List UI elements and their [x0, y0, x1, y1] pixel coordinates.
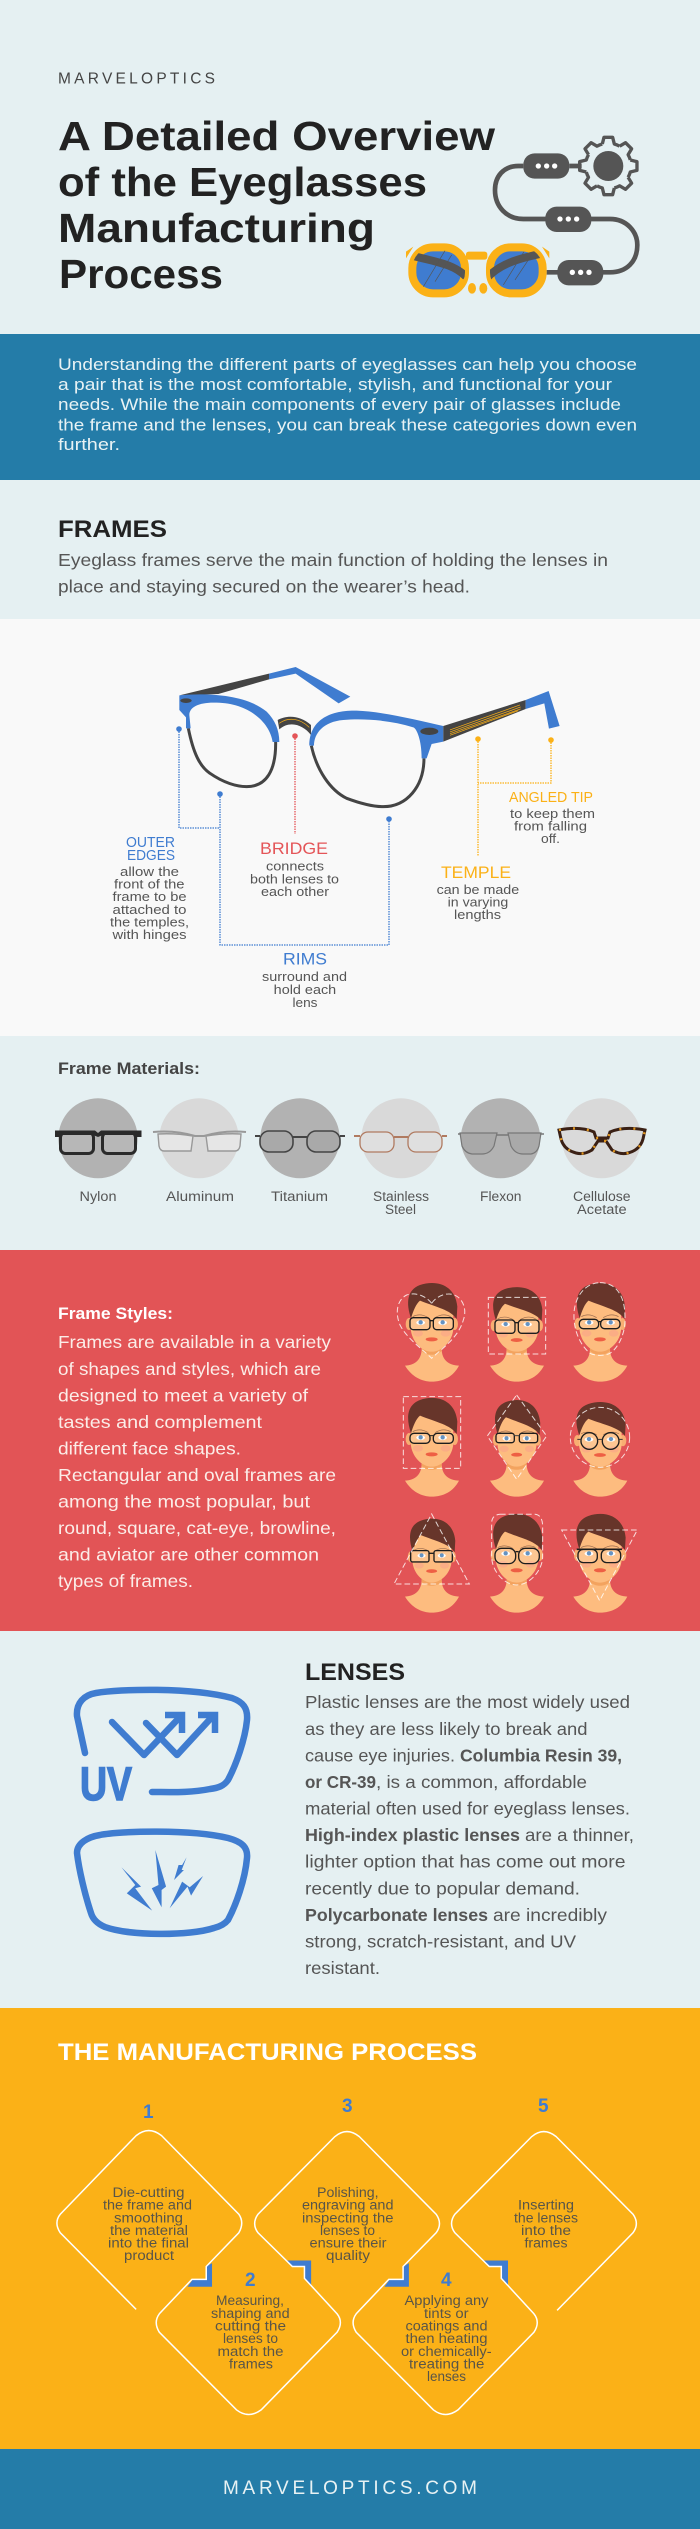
label: outer edges: with hinges — [111, 927, 187, 942]
step 2: 2 — [245, 2270, 256, 2291]
connector: 4 to 5 — [483, 2260, 508, 2285]
frames description: place and staying secured on the wearer’s head. — [58, 576, 470, 596]
intro text: a pair that is the most comfortable, stylish, and functional for your — [58, 376, 613, 394]
face: inverted triangle — [562, 1514, 637, 1613]
lenses description — [305, 1692, 634, 1978]
heading: frame materials: Frame Materials: — [58, 1059, 200, 1078]
label: bridge: BRIDGE — [260, 840, 328, 858]
lenses description: , is a common, affordable — [376, 1772, 587, 1792]
brand name: MARVELOPTICS — [58, 70, 215, 88]
step 1 — [103, 2102, 192, 2263]
intro text: needs. While the main components of every pair of glasses include — [58, 396, 621, 414]
frames description — [58, 550, 608, 596]
step 5: Inserting — [518, 2198, 574, 2213]
material: stainless steel: Stainless — [373, 1189, 429, 1204]
step 5: frames — [524, 2236, 568, 2251]
label: angled tip: to keep them — [510, 806, 595, 821]
lenses description: Plastic lenses are the most widely used — [305, 1692, 630, 1712]
face: rounded square — [490, 1514, 544, 1613]
icon: sunglasses connected to a gear — [406, 137, 637, 294]
panel: frame materials — [0, 1036, 700, 1250]
label: angled tip — [509, 789, 595, 846]
label: rims: surround and — [262, 969, 347, 984]
lenses description: High-index plastic lenses — [305, 1825, 520, 1845]
frame styles description: designed to meet a variety of — [58, 1386, 308, 1406]
step 1: the frame and — [103, 2198, 192, 2213]
lenses description: recently due to popular demand. — [305, 1878, 580, 1898]
step 2: lenses to — [223, 2331, 278, 2346]
label: outer edges: the temples, — [110, 914, 189, 930]
lenses description: Polycarbonate lenses — [305, 1905, 488, 1925]
step 3 — [302, 2096, 394, 2263]
panel: footer — [0, 2449, 700, 2529]
step 4: treating the — [409, 2357, 484, 2372]
lenses description: are incredibly — [493, 1905, 607, 1925]
step 2: frames — [229, 2357, 273, 2372]
step 3: quality — [326, 2248, 370, 2263]
label: rims: RIMS — [283, 951, 327, 969]
material: cellulose acetate: Cellulose — [573, 1189, 631, 1204]
panel: hero header — [0, 0, 700, 334]
label: rims: lens — [292, 995, 318, 1010]
step 1: the material — [110, 2223, 188, 2238]
intro text: further. — [58, 436, 120, 454]
label: outer edges: EDGES — [127, 847, 175, 864]
face: diamond — [487, 1395, 547, 1497]
label: temple: can be made — [437, 882, 519, 897]
leader lines: temple and angled tip — [475, 736, 554, 856]
step 3: engraving and — [302, 2198, 394, 2213]
connector: 1 to 2 — [187, 2263, 212, 2287]
step 2: shaping and — [211, 2306, 290, 2321]
lenses description: cause eye injuries. — [305, 1746, 455, 1766]
icon: UV protection lens: UV — [80, 1757, 133, 1810]
step 3: 3 — [342, 2096, 353, 2117]
face: triangle — [394, 1514, 469, 1613]
step 4: tints or — [424, 2306, 469, 2321]
panel: lenses — [0, 1631, 700, 2008]
intro text — [58, 356, 637, 454]
step 1: 1 — [143, 2102, 154, 2123]
step 4: or chemically- — [401, 2344, 492, 2359]
lenses description: Columbia Resin 39, — [460, 1746, 622, 1766]
heading: frame styles: Frame Styles: — [58, 1304, 173, 1323]
title: Manufacturing — [58, 205, 375, 251]
process flow diagram — [57, 2131, 636, 2414]
step 3: ensure their — [310, 2236, 387, 2251]
step 5: into the — [521, 2223, 571, 2238]
step 1: into the final — [108, 2236, 189, 2251]
label: angled tip: off. — [541, 831, 560, 846]
step 3: lenses to — [320, 2223, 375, 2238]
frame styles description: Rectangular and oval frames are — [58, 1465, 336, 1485]
step outlines — [57, 2131, 636, 2414]
lenses description: as they are less likely to break and — [305, 1719, 588, 1739]
connector: 2 to 3 — [287, 2260, 311, 2285]
label: angled tip: ANGLED TIP — [509, 789, 593, 806]
step 3: inspecting the — [302, 2210, 394, 2225]
label: bridge — [250, 840, 339, 899]
frame styles description: types of frames. — [58, 1571, 193, 1591]
label: temple: in varying — [448, 894, 508, 910]
frames description: Eyeglass frames serve the main function of holding the lenses in — [58, 550, 608, 570]
material: stainless steel: Steel — [385, 1202, 416, 1217]
label: angled tip: from falling — [514, 818, 587, 834]
step 4: coatings and — [406, 2319, 488, 2334]
frame styles description — [58, 1332, 336, 1591]
label: outer edges: frame to be — [112, 889, 186, 904]
material: cellulose acetate — [559, 1098, 645, 1217]
intro text: Understanding the different parts of eyeglasses can help you choose — [58, 356, 637, 374]
frame styles description: of shapes and styles, which are — [58, 1359, 321, 1379]
material: titanium: Titanium — [271, 1189, 328, 1204]
lenses description: strong, scratch-resistant, and UV — [305, 1932, 576, 1952]
icon: impact resistant lens — [77, 1832, 247, 1934]
label: bridge: connects — [266, 859, 325, 874]
label: outer edges: front of the — [114, 877, 184, 892]
lenses description: resistant. — [305, 1958, 380, 1978]
material: flexon — [458, 1098, 544, 1204]
label: bridge: each other — [261, 884, 330, 899]
material: nylon: Nylon — [80, 1189, 116, 1204]
step 4: lenses — [427, 2369, 466, 2384]
face: round — [570, 1402, 630, 1497]
label: temple: lengths — [454, 907, 502, 922]
step 4: 4 — [441, 2270, 452, 2291]
panel: anatomy diagram — [0, 619, 700, 1036]
frame styles description: Frames are available in a variety — [58, 1332, 331, 1352]
material: aluminum — [153, 1098, 246, 1204]
label: outer edges — [110, 834, 189, 942]
title: of the Eyeglasses — [58, 159, 427, 205]
frame styles description: tastes and complement — [58, 1412, 262, 1432]
heading: lenses: LENSES — [305, 1659, 405, 1686]
panel: manufacturing process — [0, 2008, 700, 2449]
step 2: match the — [218, 2344, 284, 2359]
step 5: the lenses — [514, 2210, 578, 2225]
panel: intro band — [0, 334, 700, 480]
label: temple: TEMPLE — [441, 864, 511, 882]
label: outer edges: attached to — [112, 902, 186, 917]
label: rims — [262, 951, 347, 1010]
title: Process — [59, 251, 223, 297]
step 2 — [211, 2270, 290, 2372]
lenses description: material often used for eyeglass lenses. — [305, 1799, 630, 1819]
material: flexon: Flexon — [480, 1189, 522, 1204]
connector: 3 to 4 — [384, 2263, 409, 2287]
step 1: Die-cutting — [112, 2185, 184, 2200]
lenses description: are a thinner, — [525, 1825, 634, 1845]
intro text: the frame and the lenses, you can break these categories down even — [58, 416, 637, 434]
step 4: Applying any — [404, 2293, 489, 2308]
material: stainless steel — [354, 1098, 447, 1217]
leader lines: outer edges and rims — [176, 726, 392, 945]
step 4: then heating — [406, 2331, 488, 2346]
title — [58, 113, 495, 297]
heading: manufacturing process: THE MANUFACTURING PROCESS — [58, 2039, 477, 2066]
step 2: cutting the — [215, 2319, 286, 2334]
material: nylon — [55, 1098, 142, 1204]
face: rectangle — [403, 1397, 461, 1497]
footer url: MARVELOPTICS.COM — [223, 2478, 477, 2499]
label: outer edges: allow the — [120, 864, 179, 879]
illustration: face shapes grid — [394, 1283, 637, 1613]
heading: frames: FRAMES — [58, 516, 167, 543]
frame styles description: among the most popular, but — [58, 1492, 310, 1512]
material: titanium — [255, 1098, 345, 1204]
title: A Detailed Overview — [58, 113, 495, 159]
step 1: product — [124, 2248, 174, 2263]
lenses description: lighter option that has come out more — [305, 1852, 626, 1872]
step 2: Measuring, — [216, 2293, 284, 2308]
label: outer edges: OUTER — [126, 834, 175, 851]
frame styles description: different face shapes. — [58, 1438, 241, 1458]
leader line: bridge — [292, 733, 298, 834]
icon: UV protection lens — [77, 1690, 247, 1810]
label: rims: hold each — [274, 982, 336, 997]
step 5: 5 — [538, 2096, 549, 2117]
material: cellulose acetate: Acetate — [577, 1202, 627, 1217]
face: heart — [397, 1283, 465, 1382]
panel: frame styles — [0, 1250, 700, 1631]
face: square — [488, 1287, 546, 1382]
label: bridge: both lenses to — [250, 871, 339, 886]
illustration: eyeglasses — [179, 667, 560, 807]
step 5 — [514, 2096, 578, 2251]
label: temple — [437, 864, 519, 922]
step 3: Polishing, — [317, 2185, 379, 2200]
step 1: smoothing — [114, 2210, 183, 2225]
frame styles description: round, square, cat-eye, browline, — [58, 1518, 336, 1538]
lenses description: or CR-39 — [305, 1772, 376, 1792]
material: aluminum: Aluminum — [166, 1189, 234, 1204]
panel: frames header — [0, 480, 700, 619]
face: oblong — [573, 1283, 627, 1382]
step 4 — [401, 2270, 492, 2384]
frame styles description: and aviator are other common — [58, 1545, 319, 1565]
